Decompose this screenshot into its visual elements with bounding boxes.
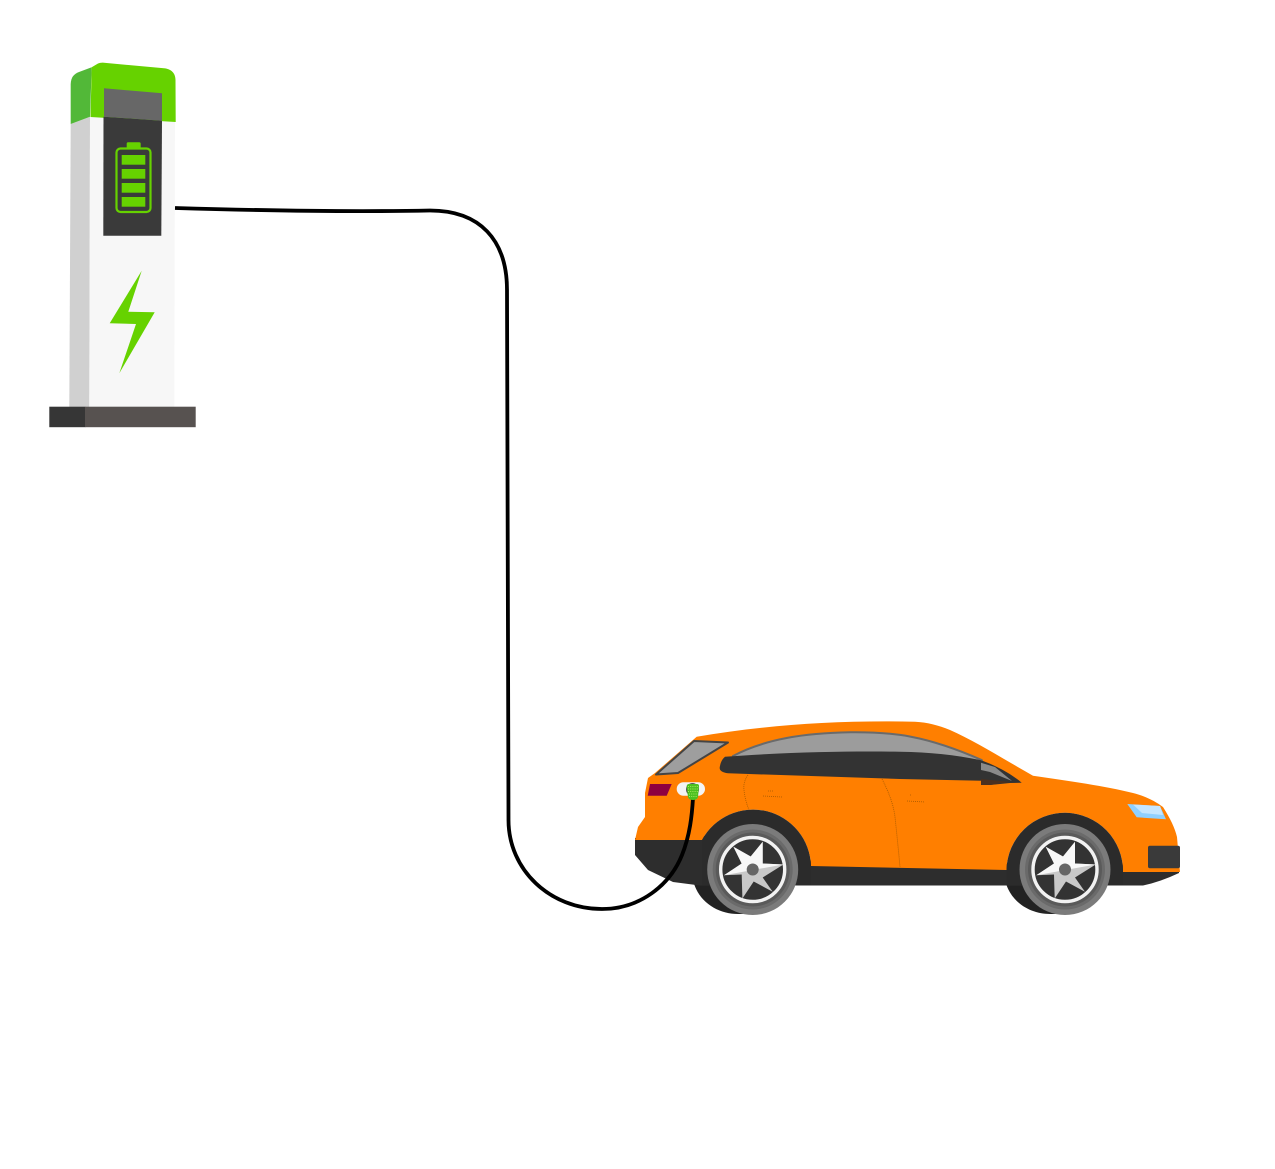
car body bbox=[635, 721, 1180, 872]
charge port bbox=[677, 782, 705, 796]
car bbox=[635, 721, 1180, 915]
charging plug bbox=[687, 784, 699, 800]
station front face bbox=[89, 117, 175, 407]
screen glare bbox=[104, 88, 162, 121]
station cap side bbox=[71, 67, 92, 124]
car lower trim bbox=[635, 835, 1179, 886]
charging station bbox=[49, 63, 196, 427]
rear wheel bbox=[707, 824, 798, 915]
charging cable bbox=[175, 208, 693, 909]
side window dark band bbox=[720, 751, 1022, 785]
port socket bbox=[686, 783, 699, 796]
icon: lightning bolt bbox=[110, 271, 155, 373]
icon: battery bbox=[116, 142, 150, 212]
side window upper bbox=[733, 732, 985, 770]
rear window bbox=[656, 741, 728, 774]
front bumper grille bbox=[1148, 846, 1180, 868]
wheel shadows bbox=[693, 880, 1072, 914]
station side face bbox=[69, 117, 90, 407]
headlight bbox=[1127, 804, 1166, 819]
station screen bbox=[103, 117, 162, 236]
side mirror bbox=[981, 763, 1012, 785]
door seams bbox=[744, 775, 925, 867]
wheel arches bbox=[702, 810, 1123, 885]
tail light bbox=[648, 784, 672, 796]
station base bbox=[49, 407, 196, 427]
station cap front bbox=[90, 63, 176, 122]
front wheel bbox=[1020, 824, 1110, 915]
